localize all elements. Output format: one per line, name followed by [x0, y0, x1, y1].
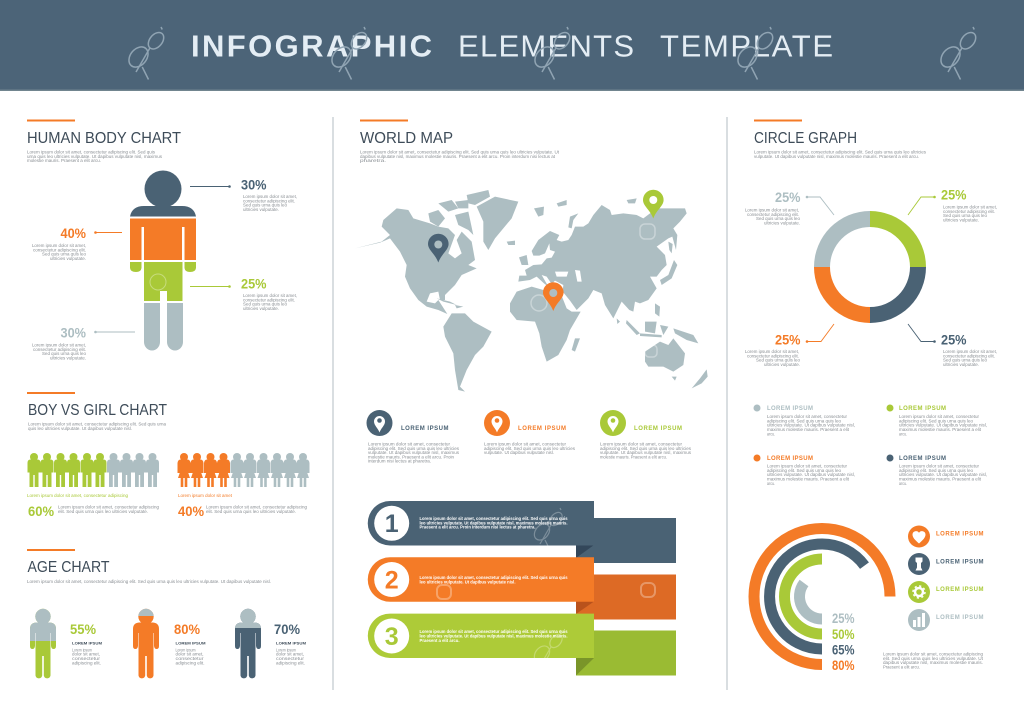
legend item: slate: adipiscing elit. Sed quis urna quis leo	[899, 468, 974, 473]
legend: green pin: vulputate. Ut dapibus vulputate nisl, maximus	[600, 450, 692, 455]
callout: torso 40%: ultricies vulputate.	[50, 256, 86, 261]
donut chart	[814, 211, 926, 323]
callout: green 25%: 25%	[941, 186, 967, 202]
stat: 60% boys	[27, 493, 160, 519]
legend item: green	[886, 404, 987, 436]
callout: head 30%: consectetur adipiscing elit.	[243, 198, 295, 203]
figure: 70%: Lorem ipsum	[276, 648, 296, 652]
callout: legs 30%: ultricies vulputate.	[50, 356, 86, 360]
figure: 55%	[30, 609, 102, 678]
icon row: tower: LOREM IPSUM	[936, 560, 984, 566]
legend: green pin	[600, 410, 692, 460]
callout: orange 25%	[745, 324, 834, 367]
callout: head 30%: 30%	[241, 176, 267, 192]
figure: 80%: LOREM IPSUM	[176, 642, 206, 646]
description: dapibus vulputate nisl, maximus molestie mauris. Praesent a elit arcu. Proin interdum nisi lectus at	[360, 154, 556, 159]
radial values: 25%	[832, 611, 854, 626]
callout: gray 25%: 25%	[775, 189, 801, 205]
legend item: orange: Lorem ipsum dolor sit amet, consectetur	[767, 464, 848, 468]
legend: orange pin: LOREM IPSUM	[518, 426, 566, 432]
callout: head 30%: ultricies vulputate.	[243, 207, 279, 212]
ribbon 1: Lorem ipsum dolor sit amet, consectetur adipiscing elit. Sed quis urna quis	[420, 516, 568, 521]
callout: hips 25%: Lorem ipsum dolor sit amet,	[243, 293, 297, 298]
callout: head 30%	[190, 176, 297, 212]
radial bars	[754, 528, 890, 664]
ribbon 3: 3	[385, 623, 399, 651]
callout: green 25%: Sed quis urna quis leo	[943, 213, 988, 218]
legend: orange pin: vulputate. Ut dapibus vulputate nisl.	[484, 450, 554, 455]
legend item: green: adipiscing elit. Sed quis urna quis leo	[899, 418, 974, 423]
figure: 80%: 80%	[174, 621, 201, 637]
legend item: slate: LOREM IPSUM	[899, 456, 946, 462]
legend: green pin: adipiscing elit. Sed quis urna quis leo ultricies	[600, 446, 692, 451]
legend item: orange: adipiscing elit. Sed quis urna quis leo	[767, 468, 842, 473]
callout: green 25%: ultricies vulputate.	[943, 218, 979, 222]
figure: 80%: Lorem ipsum	[176, 648, 196, 652]
icon row: bars: LOREM IPSUM	[936, 615, 984, 621]
legend item: gray	[754, 404, 855, 436]
stat: 40% girls	[178, 493, 308, 519]
panel: human body chart	[27, 120, 297, 360]
description	[28, 422, 167, 431]
callout: legs 30%: 30%	[60, 324, 86, 340]
legend: green pin: LOREM IPSUM	[634, 426, 682, 432]
legend item: green: arcu.	[899, 431, 907, 436]
description: pharetra.	[360, 158, 386, 163]
legend: slate pin: molestie mauris. Praesent a elit arcu. Proin	[368, 454, 455, 460]
callout: gray 25%: Lorem ipsum dolor sit amet,	[745, 208, 799, 212]
radial values: 50%	[832, 627, 854, 642]
description: Lorem ipsum dolor sit amet, consectetur adipiscing elit. Sed quis urna quis leo ultricies vulputate. Ut dapibus vulputate nisl.	[27, 579, 271, 584]
callout: torso 40%: 40%	[60, 225, 86, 241]
description: quis leo ultricies vulputate. Ut dapibus vulputate nisl.	[28, 426, 132, 431]
callout: hips 25%: 25%	[241, 276, 267, 292]
legend item: gray: Lorem ipsum dolor sit amet, consectetur	[767, 414, 848, 419]
callout: slate 25%: ultricies vulputate.	[943, 362, 979, 367]
heading: world map: WORLD MAP	[360, 130, 453, 147]
callout: green 25%: Lorem ipsum dolor sit amet,	[943, 204, 997, 210]
icon row: gear	[908, 581, 984, 603]
description: Lorem ipsum dolor sit amet, consectetur adipiscing elit. Sed quis	[27, 150, 156, 154]
callout: slate 25%: 25%	[941, 332, 967, 348]
callout: hips 25%: ultricies vulputate.	[243, 306, 279, 311]
callout: green 25%	[908, 186, 997, 222]
figure: 70%: consectetur	[276, 656, 305, 661]
stat: 60% boys: elit. Sed quis urna quis leo ultricies vulputate.	[58, 509, 148, 514]
title: INFOGRAPHIC	[191, 28, 432, 64]
legend item: gray: adipiscing elit. Sed quis urna quis leo	[767, 418, 842, 423]
figure: 70%	[235, 609, 306, 678]
stat: 40% girls: elit. Sed quis urna quis leo ultricies vulputate.	[206, 509, 296, 514]
legend item: green: maximus molestie mauris. Praesent a elit	[899, 427, 982, 432]
ribbon 3: leo ultricies vulputate. Ut dapibus vulputate nisl, maximus molestie mauris.	[420, 633, 568, 638]
callout: gray 25%: ultricies vulputate.	[764, 220, 800, 226]
legend item: gray: maximus molestie mauris. Praesent a elit	[767, 427, 850, 432]
map pin: russia	[643, 190, 664, 218]
legend item: slate: arcu.	[899, 481, 907, 486]
map pin: north america	[428, 234, 449, 262]
radial values	[832, 611, 854, 673]
legend item: slate: Lorem ipsum dolor sit amet, consectetur	[899, 464, 980, 468]
figure: 70%: LOREM IPSUM	[276, 642, 306, 646]
stat: 60% boys: Lorem ipsum dolor sit amet, consectetur adipiscing	[27, 493, 129, 498]
stat: 60% boys: 60%	[28, 503, 55, 519]
figure: 70%: 70%	[274, 621, 301, 637]
legend item: slate: maximus molestie mauris. Praesent a elit	[899, 476, 982, 482]
callout: torso 40%	[32, 225, 122, 261]
icon row: heart: LOREM IPSUM	[936, 532, 984, 538]
ribbon 1: Praesent a elit arcu. Proin interdum nisi lectus at pharetra.	[420, 525, 536, 530]
callout: torso 40%: Lorem ipsum dolor sit amet,	[32, 243, 86, 248]
figure: 70%: dolor sit amet,	[276, 652, 304, 656]
title: ELEMENTS	[458, 28, 634, 64]
legend item: green: ultricies vulputate. Ut dapibus vulputate nisl,	[899, 423, 987, 428]
callout: gray 25%	[745, 189, 834, 226]
icon row: heart	[908, 526, 984, 548]
ribbon 1: leo ultricies vulputate. Ut dapibus vulputate nisl, maximus molestie mauris.	[420, 520, 568, 525]
icon row: gear: LOREM IPSUM	[936, 587, 984, 593]
callout: legs 30%	[32, 324, 135, 360]
callout: orange 25%: 25%	[775, 332, 801, 348]
map pin: africa	[543, 282, 564, 311]
radial description: Lorem ipsum dolor sit amet, consectetur adipiscing	[883, 652, 984, 656]
watermarks on header	[125, 27, 979, 80]
pictogram: boys 60%	[28, 453, 159, 487]
legend: orange pin	[484, 410, 576, 455]
callout: torso 40%: consectetur adipiscing elit.	[33, 247, 86, 252]
figure: 70%: adipiscing elit.	[276, 660, 305, 666]
callout: torso 40%: Sed quis urna quis leo	[42, 252, 87, 257]
human figure	[130, 170, 196, 350]
description	[360, 150, 560, 163]
figure: 80%: adipiscing elit.	[176, 660, 204, 666]
ribbon 3: Praesent a elit arcu.	[420, 638, 460, 643]
icon row: bars	[908, 609, 984, 631]
figure: 80%: consectetur	[176, 656, 204, 661]
legend: slate pin: LOREM IPSUM	[401, 426, 448, 432]
callout: orange 25%: Lorem ipsum dolor sit amet,	[745, 349, 799, 354]
legend item: orange	[754, 454, 855, 486]
watermarks on ribbons	[437, 508, 655, 672]
stat: 40% girls: Lorem ipsum dolor sit amet	[178, 493, 233, 498]
description	[754, 150, 927, 159]
stat: 60% boys: Lorem ipsum dolor sit amet, consectetur adipiscing	[58, 504, 160, 510]
panel: world map	[355, 120, 708, 464]
legend item: slate: ultricies vulputate. Ut dapibus vulputate nisl,	[899, 472, 987, 477]
panel: age chart	[27, 549, 306, 678]
panel: numbered ribbons	[368, 501, 676, 676]
pictogram: girls 40%	[178, 453, 310, 487]
figure: 55%: LOREM IPSUM	[72, 642, 102, 646]
legend: slate pin: Lorem ipsum dolor sit amet, consectetur	[368, 442, 451, 446]
figure: 80%: dolor sit amet,	[176, 652, 204, 656]
figure: 80%	[133, 609, 206, 678]
callout: legs 30%: Lorem ipsum dolor sit amet,	[32, 342, 86, 348]
legend: slate pin: interdum nisi lectus at pharetra.	[368, 459, 431, 464]
panel: radial progress chart	[754, 526, 984, 673]
callout: green 25%: consectetur adipiscing elit.	[943, 209, 995, 214]
legend item: green: Lorem ipsum dolor sit amet, consectetur	[899, 414, 980, 419]
legend item: orange: ultricies vulputate. Ut dapibus vulputate nisl,	[767, 472, 855, 477]
figure: 55%: 55%	[70, 621, 97, 637]
description	[27, 150, 163, 163]
legend item: green: LOREM IPSUM	[899, 406, 946, 412]
figure: 55%: Lorem ipsum	[72, 648, 92, 652]
callout: orange 25%: ultricies vulputate.	[764, 362, 800, 367]
description: molestie mauris. Praesent a elit arcu.	[27, 158, 101, 163]
legend: orange pin: Lorem ipsum dolor sit amet, consectetur	[484, 442, 567, 446]
radial description: dapibus vulputate nisl, maximus molestie mauris.	[883, 660, 983, 665]
callout: legs 30%: consectetur adipiscing elit.	[33, 347, 86, 352]
legend: green pin: molestie mauris. Praesent a elit arcu.	[600, 454, 667, 460]
legend item: gray: ultricies vulputate. Ut dapibus vulputate nisl,	[767, 423, 855, 428]
header banner	[0, 0, 1024, 91]
radial description: elit. Sed quis urna quis leo ultricies vulputate. Ut	[883, 656, 984, 661]
stat: 40% girls: 40%	[178, 503, 205, 519]
heading: boy vs girl chart: BOY VS GIRL CHART	[28, 402, 167, 419]
description: urna quis leo ultricies vulputate. Ut dapibus vulputate nisl, maximus	[27, 154, 163, 159]
description: Lorem ipsum dolor sit amet, consectetur adipiscing elit. Sed quis urna quis leo ultricies vulputate. Ut	[360, 150, 560, 154]
ribbon 1: 1	[385, 510, 399, 538]
callout: hips 25%: Sed quis urna quis leo	[243, 302, 288, 307]
figure: 55%: adipiscing elit.	[72, 660, 101, 666]
legend item: orange: arcu.	[767, 481, 775, 486]
legend item: orange: maximus molestie mauris. Praesent a elit	[767, 476, 850, 482]
callout: slate 25%: consectetur adipiscing elit.	[943, 353, 995, 358]
legend: slate pin: adipiscing elit. Sed quis urna quis leo ultricies	[368, 446, 460, 451]
ribbon 1	[368, 501, 676, 563]
ribbon 2	[368, 557, 676, 620]
ribbon 3: Lorem ipsum dolor sit amet, consectetur adipiscing elit. Sed quis urna quis	[420, 629, 568, 634]
heading: human body chart: HUMAN BODY CHART	[27, 130, 181, 147]
radial values: 65%	[832, 642, 854, 658]
radial description	[883, 652, 984, 670]
heading: circle graph: CIRCLE GRAPH	[754, 130, 857, 147]
legend: slate pin	[366, 410, 460, 464]
description: vulputate. Ut dapibus vulputate nisl, maximus molestie mauris. Praesent a elit arcu.	[754, 154, 919, 159]
panel: boy vs girl chart	[27, 392, 310, 519]
callout: gray 25%: Sed quis urna quis leo	[756, 216, 801, 221]
stat: 40% girls: Lorem ipsum dolor sit amet, consectetur adipiscing	[206, 504, 308, 510]
legend: slate pin: vulputate. Ut dapibus vulputate nisl, maximus	[368, 450, 460, 455]
legend item: orange: LOREM IPSUM	[767, 456, 813, 462]
ribbon 3	[368, 614, 676, 676]
callout: slate 25%: Sed quis urna quis leo	[943, 358, 988, 363]
legend item: gray: LOREM IPSUM	[767, 406, 813, 412]
legend: green pin: Lorem ipsum dolor sit amet, consectetur	[600, 442, 683, 446]
callout: hips 25%: consectetur adipiscing elit.	[243, 297, 295, 302]
icon row: tower	[908, 553, 984, 575]
callout: head 30%: Lorem ipsum dolor sit amet,	[243, 194, 297, 199]
radial description: Praesent a elit arcu.	[883, 664, 920, 670]
legend item: gray: arcu.	[767, 431, 775, 436]
callout: head 30%: Sed quis urna quis leo	[243, 203, 288, 208]
world map shapes	[355, 190, 708, 392]
callout: hips 25%	[190, 276, 297, 311]
column dividers	[332, 117, 728, 690]
callout: gray 25%: consectetur adipiscing elit.	[747, 212, 799, 217]
figure: 55%: dolor sit amet,	[72, 652, 100, 656]
radial values: 80%	[832, 658, 854, 673]
title	[191, 28, 833, 64]
description: Lorem ipsum dolor sit amet, consectetur adipiscing elit. Sed quis urna	[28, 422, 167, 426]
ribbon 2: leo ultricies vulputate. Ut dapibus vulputate nisl.	[420, 579, 516, 584]
title: TEMPLATE	[660, 28, 833, 64]
callout: legs 30%: Sed quis urna quis leo	[42, 351, 87, 356]
callout: orange 25%: consectetur adipiscing elit.	[747, 353, 799, 358]
panel: circle graph	[745, 120, 997, 486]
ribbon 2: 2	[385, 566, 399, 594]
callout: slate 25%: Lorem ipsum dolor sit amet,	[943, 349, 997, 354]
description: Lorem ipsum dolor sit amet, consectetur adipiscing elit. Sed quis urna quis leo ultricies	[754, 150, 927, 154]
ribbon 2: Lorem ipsum dolor sit amet, consectetur adipiscing elit. Sed quis urna quis	[420, 575, 568, 580]
heading: age chart: AGE CHART	[28, 559, 110, 576]
legend: orange pin: adipiscing elit. Sed quis urna quis leo ultricies	[484, 446, 576, 451]
callout: orange 25%: Sed quis urna quis leo	[756, 358, 801, 363]
legend item: slate	[886, 454, 987, 486]
figure: 55%: consectetur	[72, 656, 101, 661]
callout: slate 25%	[908, 324, 997, 367]
